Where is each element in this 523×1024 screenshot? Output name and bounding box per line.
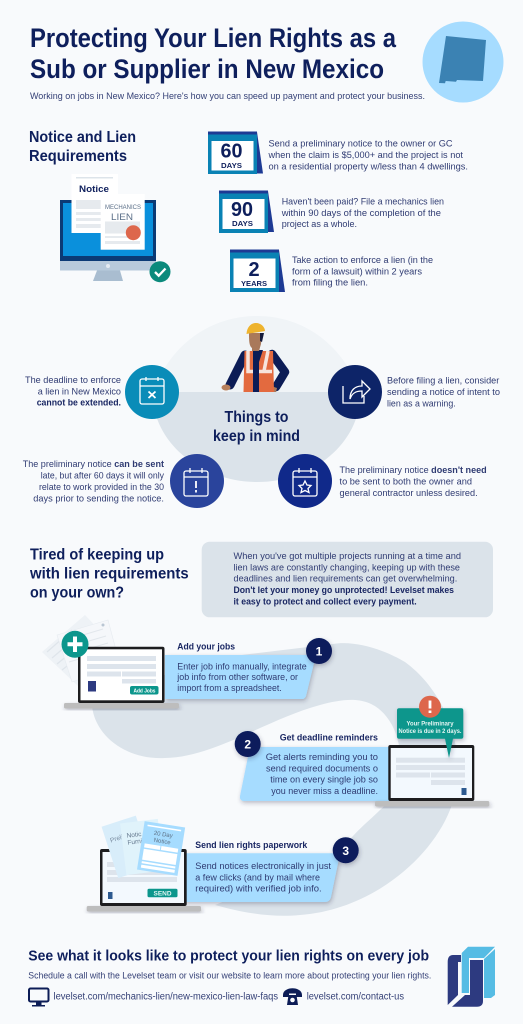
text: 90 day mechanics lien: within 90 days of the completion of the — [281, 208, 441, 219]
step 1 text: import from a spreadsheet. — [177, 683, 282, 694]
heading: things to keep in mind — [213, 409, 300, 445]
panel: things to keep in mind — [23, 316, 500, 508]
illustration: lien documents — [102, 816, 185, 878]
heading: notice and lien requirements: Notice and Lien — [29, 129, 136, 146]
icon: monitor with notice and lien documents — [60, 174, 170, 282]
step 3 text: Send notices electronically in just — [195, 861, 331, 872]
calendar: 90 days: DAYS — [232, 219, 253, 228]
text: deadline cannot be extended — [25, 375, 121, 409]
title: Protecting Your Lien Rights as a — [30, 23, 396, 53]
step number 3: 3 — [342, 844, 349, 858]
text: 90 day mechanics lien: project as a whole. — [282, 219, 357, 230]
heading: tired of keeping up — [29, 546, 189, 601]
callout box: it easy to protect and collect every payment. — [234, 596, 417, 608]
step 2 text: send required documents o — [266, 763, 378, 774]
text: 60 day preliminary notice: Send a preliminary notice to the owner or GC — [268, 138, 453, 150]
step 2 text: you never miss a deadline. — [271, 786, 378, 797]
calendar: 60 days — [208, 132, 263, 174]
callout box — [202, 542, 493, 617]
illustration: lien documents: Preli — [109, 834, 124, 845]
text: 60 day preliminary notice — [268, 138, 468, 172]
icon: calendar with x — [125, 365, 179, 419]
logo: levelset — [448, 947, 495, 1007]
step number 1 — [306, 638, 332, 664]
illustration: lien documents: Notice — [153, 838, 172, 846]
step number 2: 2 — [244, 738, 251, 752]
decorative s-curve ribbon — [92, 643, 458, 916]
step 1 heading: Add your jobs — [177, 641, 235, 652]
title: Sub or Supplier in New Mexico — [30, 54, 384, 84]
website link: levelset.com/mechanics-lien/new-mexico-lien-law-faqs — [54, 992, 278, 1003]
illustration: construction worker — [222, 323, 285, 392]
step 1 description box — [165, 655, 315, 699]
heading: notice and lien requirements — [29, 129, 136, 165]
step 2 text — [266, 752, 378, 797]
callout box: lien laws are constantly changing, keeping up with these — [234, 562, 460, 574]
backdrop ellipse — [153, 316, 360, 482]
step 3: send lien rights paperwork — [87, 816, 359, 912]
step 3 text — [195, 861, 331, 895]
illustration: laptop with form — [375, 745, 489, 806]
calendar: 60 days: 60 — [220, 140, 242, 162]
step 2: get deadline reminders — [235, 696, 489, 806]
text: deadline cannot be extended: cannot be extended. — [37, 398, 121, 409]
illustration: laptop with send button — [87, 849, 201, 912]
step 2 text: time on every single job so — [270, 775, 378, 786]
text: notice of intent: Before filing a lien, consider — [387, 375, 500, 386]
icon: monitor — [29, 988, 48, 1006]
text: 2 year enforcement: form of a lawsuit) within 2 years — [292, 266, 422, 278]
callout: notice due alert: Notice is due in 2 days. — [398, 729, 462, 735]
text: preliminary notice recipients: The preliminary notice doesn't need — [340, 465, 487, 476]
illustration: laptop with add jobs form — [64, 647, 179, 708]
step 1 text — [176, 661, 307, 694]
heading: notice and lien requirements: Requirements — [29, 148, 127, 165]
callout: notice due alert — [397, 696, 463, 758]
text: 90 day mechanics lien — [281, 196, 444, 230]
step 2 text: Get alerts reminding you to — [266, 752, 378, 763]
icon: calendar with star — [278, 454, 332, 508]
callout: notice due alert: Your Preliminary — [406, 722, 454, 728]
icon: monitor with notice and lien documents: Notice — [79, 184, 109, 195]
icon: monitor with notice and lien documents: MECHANICS — [105, 205, 141, 211]
step 1: add your jobs — [42, 615, 332, 708]
step 3 description box — [184, 853, 340, 902]
step 2 description box — [240, 747, 392, 801]
calendar: 2 years: 2 — [248, 259, 260, 281]
text: preliminary notice recipients — [340, 465, 487, 499]
calendar: 90 days — [219, 190, 274, 233]
heading: tired of keeping up: Tired of keeping up — [30, 546, 164, 563]
text: notice of intent: sending a notice of intent to — [387, 387, 500, 398]
text: preliminary notice recipients: to be sent to both the owner and — [340, 477, 472, 488]
text: 90 day mechanics lien: Haven't been paid? File a mechanics lien — [282, 196, 444, 208]
illustration: laptop with send button: SEND — [154, 890, 172, 898]
step 1 text: job info from other software, or — [176, 672, 299, 683]
heading: things to keep in mind: Things to — [224, 409, 288, 426]
illustration: lien documents: 20 Day — [153, 831, 173, 840]
footer text: Schedule a call with the Levelset team or visit our website to learn more about protecting your lien rights. — [28, 970, 431, 980]
heading: tired of keeping up: on your own? — [30, 584, 124, 601]
step 3 text: a few clicks (and by mail where — [195, 872, 320, 883]
text: preliminary notice can be sent late: relate to work provided in the 30 — [39, 482, 164, 493]
text: deadline cannot be extended: a lien in New Mexico — [38, 386, 121, 397]
step number 2 — [235, 731, 261, 757]
illustration: laptop with add jobs form: Add Jobs — [134, 688, 156, 694]
text: preliminary notice recipients: general contractor unless desired. — [340, 488, 478, 499]
subtitle: Working on jobs in New Mexico? Here's how you can speed up payment and protect your business. — [30, 91, 425, 101]
step 3 text: required) with verified job info. — [195, 884, 322, 895]
contact link: levelset.com/contact-us — [307, 992, 404, 1003]
text: 60 day preliminary notice: on a residential property w/less than 4 dwellings. — [268, 162, 468, 172]
text: 60 day preliminary notice: when the claim is $5,000+ and the project is not — [268, 150, 463, 161]
calendar: 60 days: DAYS — [221, 161, 242, 170]
panel: tired of keeping up — [29, 542, 493, 617]
header — [30, 22, 504, 102]
callout box: Don't let your money go unprotected! Levelset makes — [234, 585, 454, 596]
text: preliminary notice can be sent late — [23, 459, 165, 504]
step 2 heading: Get deadline reminders — [280, 733, 378, 744]
heading: tired of keeping up: with lien requirements — [29, 565, 189, 582]
icon: telephone — [283, 988, 302, 1005]
callout box: When you've got multiple projects running at a time and — [234, 551, 461, 562]
text: preliminary notice can be sent late: late, but after 60 days it will only — [41, 470, 164, 482]
footer — [28, 947, 495, 1007]
text: 2 year enforcement: from filing the lien. — [292, 278, 368, 288]
heading: things to keep in mind: keep in mind — [213, 428, 300, 445]
illustration: lien documents: Furni — [127, 838, 143, 847]
calendar: 2 years — [230, 250, 285, 292]
icon: green plus — [62, 631, 88, 658]
text: preliminary notice can be sent late: The preliminary notice can be sent — [23, 459, 165, 470]
text: notice of intent — [387, 375, 500, 410]
calendar: 90 days: 90 — [231, 199, 253, 221]
footer heading: See what it looks like to protect your lien rights on every job — [28, 949, 429, 965]
illustration: documents behind laptop — [42, 615, 120, 686]
icon: notice of intent arrow — [328, 365, 382, 419]
text: deadline cannot be extended: The deadline to enforce — [25, 375, 121, 386]
title — [30, 23, 396, 84]
step number 1: 1 — [316, 644, 323, 658]
text: notice of intent: lien as a warning. — [387, 398, 456, 410]
step 1 text: Enter job info manually, integrate — [177, 661, 307, 672]
text: 2 year enforcement: Take action to enforce a lien (in the — [292, 255, 433, 266]
icon: New Mexico state map — [422, 22, 504, 102]
icon: calendar with exclamation — [170, 454, 224, 508]
text: 2 year enforcement — [292, 255, 433, 288]
callout box: deadlines and lien requirements can get overwhelming. — [234, 574, 457, 585]
panel: notice and lien requirements — [29, 129, 468, 292]
step 3 heading: Send lien rights paperwork — [195, 840, 308, 851]
calendar: 2 years: YEARS — [241, 279, 267, 288]
text: preliminary notice can be sent late: days prior to sending the notice. — [33, 493, 164, 504]
icon: monitor with notice and lien documents: LIEN — [111, 212, 133, 223]
step number 3 — [333, 837, 359, 863]
illustration: lien documents: Notic — [126, 831, 143, 840]
